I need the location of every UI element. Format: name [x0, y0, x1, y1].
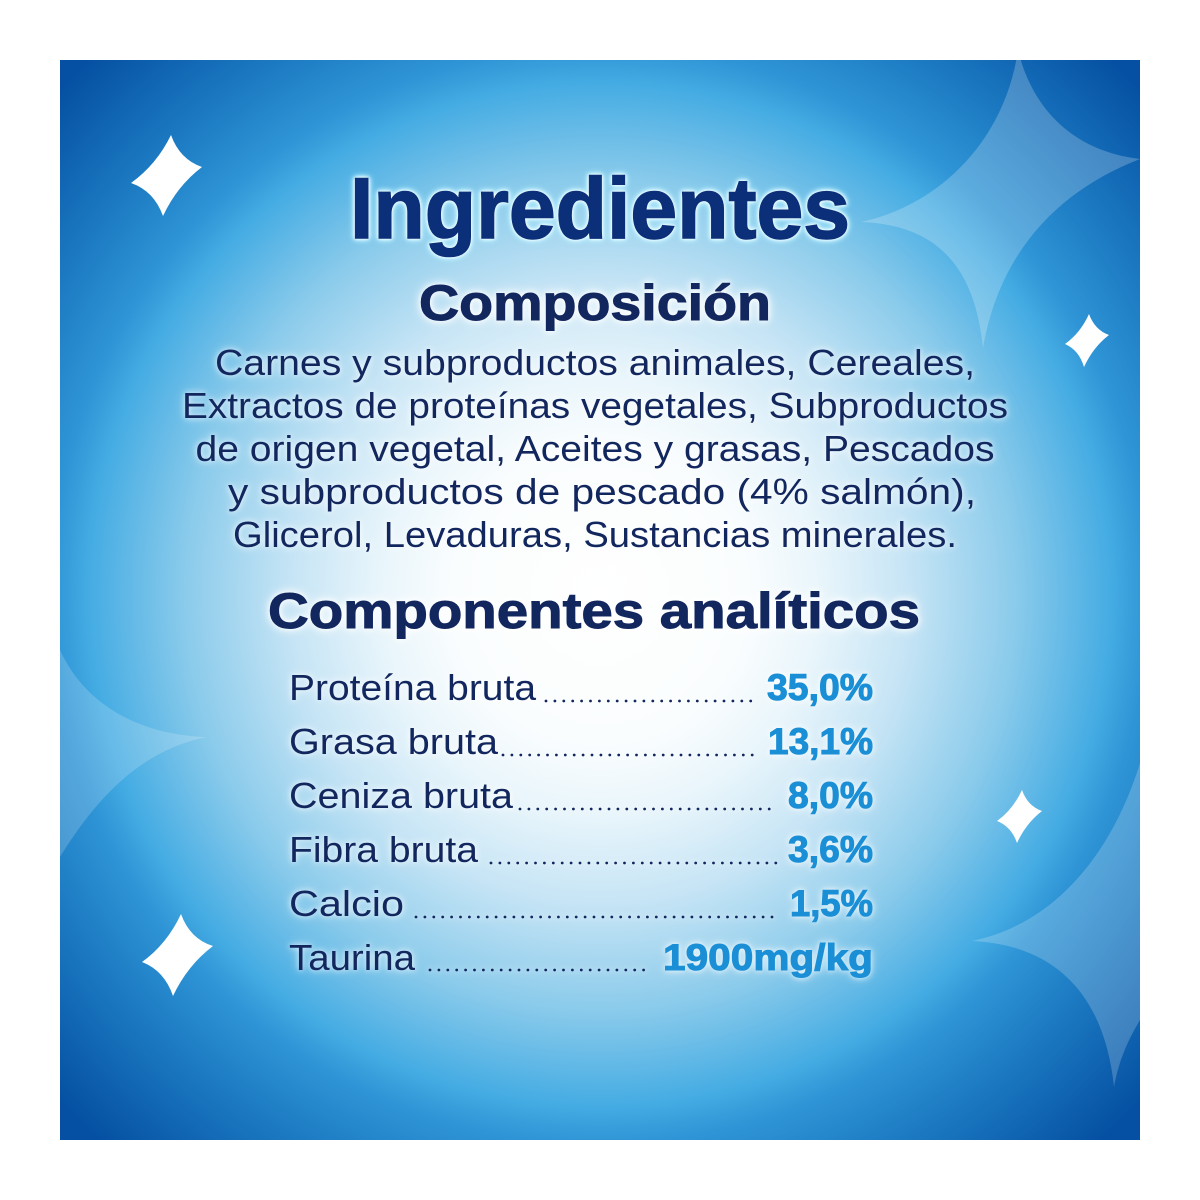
row: Proteína bruta — [289, 667, 873, 708]
heading: Composición: Composición — [419, 275, 771, 331]
text block: composition — [182, 342, 1008, 555]
row: Proteína bruta: 35,0% — [767, 667, 873, 708]
icon: sparkle lower right — [997, 790, 1042, 843]
row: Grasa bruta: 13,1% — [768, 721, 873, 762]
row: Proteína bruta: Proteína bruta — [289, 667, 537, 708]
icon: sparkle bottom left — [142, 914, 213, 996]
row: Calcio: 1,5% — [790, 883, 873, 924]
icon: sparkle top left — [131, 135, 202, 216]
row: Fibra bruta — [289, 829, 873, 870]
text block: composition: Glicerol, Levaduras, Sustancias minerales. — [233, 514, 957, 555]
row: Taurina: 1900mg/kg — [663, 937, 873, 978]
text block: composition: Carnes y subproductos animales, Cereales, — [215, 342, 975, 383]
text block: composition: y subproductos de pescado (4% salmón), — [228, 471, 976, 512]
row: Ceniza bruta: Ceniza bruta — [289, 775, 514, 816]
text block: composition: de origen vegetal, Aceites y grasas, Pescados — [196, 428, 995, 469]
row: Fibra bruta: 3,6% — [788, 829, 873, 870]
row: Taurina — [289, 937, 873, 978]
row: Grasa bruta: Grasa bruta — [289, 721, 499, 762]
row: Grasa bruta — [289, 721, 873, 762]
icon: sparkle right — [1065, 314, 1109, 367]
row: Ceniza bruta — [289, 775, 873, 816]
row: Calcio: Calcio — [289, 883, 404, 924]
row: Calcio — [289, 883, 873, 924]
row: Ceniza bruta: 8,0% — [788, 775, 873, 816]
row: Taurina: Taurina — [289, 937, 416, 978]
table: analytical components — [289, 667, 873, 978]
heading: Componentes analíticos: Componentes analíticos — [268, 583, 920, 639]
row: Fibra bruta: Fibra bruta — [289, 829, 479, 870]
text block: composition: Extractos de proteínas vegetales, Subproductos — [182, 385, 1008, 426]
title: Ingredientes — [350, 161, 850, 257]
